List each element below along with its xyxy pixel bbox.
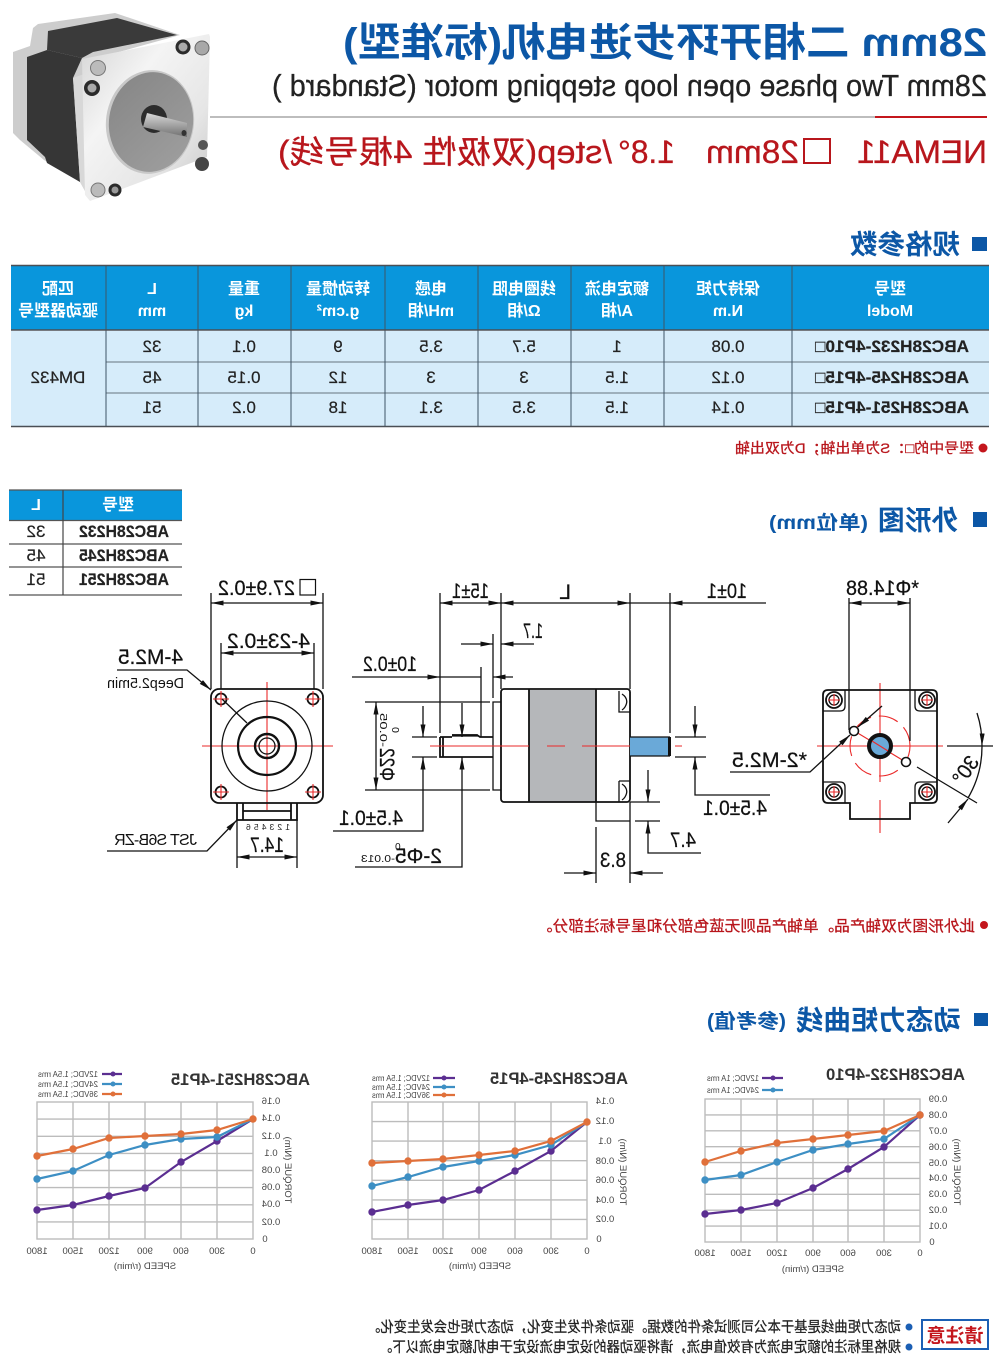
y axis labels: 0.05 bbox=[929, 1158, 947, 1169]
table row 3: ABC28H251-4P15□ bbox=[815, 398, 969, 417]
table row 2: 12 bbox=[329, 368, 347, 387]
drawing: rear view: *Φ14.88 bbox=[846, 577, 919, 600]
x axis labels: 900 bbox=[471, 1246, 487, 1257]
chart: ABC28H251-4P15: ABC28H251-4P15 bbox=[171, 1070, 310, 1089]
table header cells: mm bbox=[138, 303, 166, 320]
x axis labels: 900 bbox=[137, 1246, 153, 1257]
drawing: front view: JST S6B-ZR bbox=[114, 832, 197, 849]
note: outline drawing: 此外形图为双轴产品。单轴产品则无蓝色部分和星号标注部分。 bbox=[537, 918, 975, 935]
legend bbox=[38, 1069, 122, 1099]
y axis labels: 0.12 bbox=[262, 1131, 280, 1142]
chart: ABC28H232-4P10: SPEED (r/min) bbox=[782, 1264, 844, 1275]
legend: 12VDC; 1.5A rms bbox=[38, 1069, 98, 1079]
specification summary line bbox=[278, 134, 987, 170]
chart: ABC28H245-4P15: TORQUE (N/m) bbox=[617, 1139, 628, 1205]
drawing: side view: 4.5±0.1 bbox=[339, 807, 403, 830]
drawing: side view: L bbox=[559, 581, 571, 604]
drawing: front view: 14.7 bbox=[250, 834, 284, 857]
legend bbox=[707, 1073, 783, 1095]
y axis labels bbox=[596, 1096, 614, 1245]
table header cells: 额定电流 bbox=[585, 279, 649, 298]
x axis labels: 1200 bbox=[432, 1246, 454, 1257]
footnote 1: 动态力矩曲线是基于本公司测试条件的数据。驱动条件发生变化，动态力矩也会发生变化。 bbox=[367, 1319, 901, 1336]
small table: length by model: 51 bbox=[27, 570, 45, 589]
legend bbox=[372, 1073, 455, 1100]
x axis labels: 300 bbox=[876, 1248, 892, 1259]
small table: length by model: ABC28H251 bbox=[79, 570, 169, 589]
subtitle: 28mm Two phase open loop stepping motor (Standard ) bbox=[272, 68, 987, 103]
x axis labels: 0 bbox=[917, 1248, 923, 1259]
drawing: side view: Φ22 bbox=[375, 748, 398, 781]
y axis labels: 0 bbox=[929, 1237, 935, 1248]
table header cells: 重量 bbox=[228, 280, 260, 298]
chart: ABC28H251-4P15 bbox=[26, 1069, 310, 1272]
table header cells: A/相 bbox=[601, 302, 633, 320]
drawing: side view: 4.5±0.1 bbox=[703, 797, 767, 820]
table row 2: 3 bbox=[426, 368, 436, 387]
drawing: rear view: *2-M2.5 bbox=[732, 749, 807, 772]
table header cells: 保持力矩 bbox=[696, 280, 760, 298]
table row 3: 3.1 bbox=[419, 398, 443, 417]
small table: length by model: 型号 bbox=[102, 496, 134, 514]
drawing: front view bbox=[107, 577, 333, 868]
y axis labels: 0.16 bbox=[262, 1096, 280, 1107]
legend: 24VDC; 1.5A rms bbox=[372, 1082, 430, 1092]
y axis labels: 0.08 bbox=[929, 1110, 947, 1121]
table row 1: 3.5 bbox=[419, 337, 443, 356]
table row 2: 1.5 bbox=[605, 368, 629, 387]
legend: 24VDC; 1A rms bbox=[707, 1085, 759, 1095]
drawing: side view: -0.013 bbox=[360, 854, 395, 865]
legend: 12VDC; 1.5A rms bbox=[372, 1073, 430, 1083]
y axis labels: 0.14 bbox=[596, 1096, 614, 1107]
table header cells: 转动惯量 bbox=[306, 279, 370, 298]
table row 2: 0.12 bbox=[711, 368, 745, 387]
heading: dynamic torque curves: (参考值) bbox=[707, 1009, 786, 1033]
x axis labels bbox=[26, 1246, 256, 1257]
table row 3: 3.5 bbox=[512, 398, 536, 417]
y axis labels: 0.02 bbox=[262, 1217, 280, 1228]
table row 3: 0.2 bbox=[232, 398, 256, 417]
table header cells: kg bbox=[235, 303, 253, 320]
specification summary line: NEMA11 bbox=[857, 134, 987, 170]
drawing: front view: 27.9±0.2 bbox=[218, 577, 295, 600]
y axis labels: 0.12 bbox=[596, 1116, 614, 1127]
legend: 36VDC; 1.5A rms bbox=[372, 1090, 430, 1100]
legend: 24VDC; 1.5A rms bbox=[38, 1079, 98, 1089]
drawing: side view: 10±1 bbox=[707, 580, 747, 603]
y axis labels: 0.1 bbox=[598, 1136, 612, 1147]
footnote 2: 规格里标注的额定电流为有效值电流，请将驱动器的设定电流设定于电机额定电流以下。 bbox=[379, 1339, 901, 1356]
drawing: side view: 4.7 bbox=[670, 829, 696, 852]
callout: attention label bbox=[922, 1320, 988, 1349]
table row 1: 32 bbox=[143, 337, 161, 356]
x axis labels: 0 bbox=[584, 1246, 590, 1257]
x axis labels: 0 bbox=[250, 1246, 256, 1257]
x axis labels: 300 bbox=[209, 1246, 225, 1257]
table row 3: 1.5 bbox=[605, 398, 629, 417]
y axis labels bbox=[262, 1096, 280, 1245]
table row 2: 0.15 bbox=[227, 368, 261, 387]
table row 3 bbox=[143, 398, 969, 417]
x axis labels: 1500 bbox=[62, 1246, 84, 1257]
heading: outline drawing: 外形图 bbox=[878, 506, 958, 536]
table row 1 bbox=[143, 337, 969, 356]
table header cells: 电感 bbox=[415, 279, 447, 298]
y axis labels: 0 bbox=[596, 1234, 602, 1245]
legend: 36VDC; 1.5A rms bbox=[38, 1089, 98, 1099]
chart: ABC28H251-4P15: TORQUE (N/m) bbox=[282, 1137, 293, 1203]
table row 1: 1 bbox=[612, 337, 622, 356]
x axis labels: 1500 bbox=[730, 1248, 752, 1259]
x axis labels bbox=[361, 1246, 590, 1257]
small table: length by model: ABC28H245 bbox=[79, 546, 169, 565]
table header cells: mH/相 bbox=[408, 302, 454, 320]
table header cells: g.cm² bbox=[317, 303, 359, 320]
y axis labels: 0.02 bbox=[929, 1205, 947, 1216]
small table: length by model: 45 bbox=[27, 546, 45, 565]
table row 2: 45 bbox=[143, 368, 161, 387]
y axis labels: 0.06 bbox=[596, 1175, 614, 1186]
heading: outline drawing bbox=[769, 506, 987, 536]
y axis labels: 0.1 bbox=[264, 1148, 278, 1159]
table: specifications bbox=[11, 266, 989, 426]
specification summary line: 28mm bbox=[706, 134, 799, 170]
y axis labels bbox=[929, 1094, 947, 1248]
heading: outline drawing: (单位mm) bbox=[769, 511, 868, 534]
x axis labels: 1800 bbox=[694, 1248, 716, 1259]
drawing: side view: 1.7 bbox=[523, 620, 543, 643]
chart: ABC28H245-4P15: ABC28H245-4P15 bbox=[490, 1069, 628, 1088]
y axis labels: 0.04 bbox=[596, 1195, 614, 1206]
table row 2: ABC28H245-4P15□ bbox=[815, 368, 969, 387]
photo: stepper motor bbox=[13, 13, 210, 201]
y axis labels: 0.07 bbox=[929, 1126, 947, 1137]
x axis labels bbox=[694, 1248, 923, 1259]
y axis labels: 0.08 bbox=[262, 1165, 280, 1176]
chart: ABC28H232-4P10 bbox=[694, 1065, 965, 1275]
table header cells bbox=[18, 279, 913, 320]
y axis labels: 0.06 bbox=[929, 1142, 947, 1153]
drawing: rear view bbox=[730, 577, 993, 833]
x axis labels: 600 bbox=[173, 1246, 189, 1257]
table row 1: 0.1 bbox=[232, 337, 256, 356]
drawing: front view: Deep2.5min bbox=[107, 675, 184, 692]
table header cells: 匹配 bbox=[42, 281, 74, 298]
table header cells: 线圈电阻 bbox=[492, 279, 556, 298]
table row 1: 9 bbox=[333, 337, 343, 356]
y axis labels: 0.01 bbox=[929, 1221, 947, 1232]
small table: length by model: 32 bbox=[27, 522, 45, 541]
table header cells: Model bbox=[867, 303, 913, 320]
table header cells: Ω/相 bbox=[507, 302, 541, 320]
matching driver cell: DM432 bbox=[31, 368, 85, 387]
x axis labels: 1200 bbox=[766, 1248, 788, 1259]
table header cells: 型号 bbox=[874, 280, 906, 298]
drawing: front view: 4-M2.5 bbox=[118, 646, 183, 669]
table row 3: 18 bbox=[329, 398, 347, 417]
x axis labels: 300 bbox=[543, 1246, 559, 1257]
table header cells: L bbox=[147, 281, 157, 298]
x axis labels: 1800 bbox=[26, 1246, 48, 1257]
small table: length by model: L bbox=[31, 497, 41, 514]
x axis labels: 600 bbox=[840, 1248, 856, 1259]
table row 1: 5.7 bbox=[512, 337, 536, 356]
drawing: side view: 2-Φ5 bbox=[395, 845, 442, 868]
drawing: side view: 0 bbox=[389, 727, 401, 733]
heading: specifications: 规格参数 bbox=[850, 230, 960, 260]
drawing: side view: 15±1 bbox=[452, 580, 489, 603]
small table: length by model bbox=[9, 490, 182, 595]
x axis labels: 1800 bbox=[361, 1246, 383, 1257]
drawing: side view: 10±0.2 bbox=[363, 653, 417, 676]
y axis labels: 0.09 bbox=[929, 1094, 947, 1105]
table row 1: ABC28H232-4P10□ bbox=[815, 337, 969, 356]
drawing: side view: 0 bbox=[395, 842, 401, 853]
chart: ABC28H251-4P15: SPEED (r/min) bbox=[114, 1261, 176, 1272]
drawing: side view bbox=[333, 580, 770, 883]
y axis labels: 0.06 bbox=[262, 1182, 280, 1193]
table header cells: N.m bbox=[713, 303, 743, 320]
x axis labels: 1500 bbox=[397, 1246, 419, 1257]
y axis labels: 0.14 bbox=[262, 1113, 280, 1124]
x axis labels: 1200 bbox=[98, 1246, 120, 1257]
table row 3: 0.14 bbox=[711, 398, 745, 417]
table row 2: 3 bbox=[519, 368, 529, 387]
y axis labels: 0 bbox=[262, 1234, 268, 1245]
callout: attention label: 请注意 bbox=[926, 1324, 984, 1347]
x axis labels: 900 bbox=[805, 1248, 821, 1259]
drawing: side view: -0.05 bbox=[377, 713, 389, 747]
header rule bbox=[210, 116, 987, 118]
specification summary line: /step(双极性 4根号线) bbox=[278, 134, 612, 170]
chart: ABC28H245-4P15 bbox=[361, 1069, 628, 1272]
heading: dynamic torque curves bbox=[707, 1006, 988, 1036]
chart: ABC28H232-4P10: TORQUE (N/m) bbox=[951, 1139, 962, 1205]
small table: length by model: ABC28H232 bbox=[79, 522, 169, 541]
x axis labels: 600 bbox=[507, 1246, 523, 1257]
table row 3: 51 bbox=[143, 398, 161, 417]
drawing: rear view: 30° bbox=[948, 752, 984, 789]
y axis labels: 0.04 bbox=[929, 1173, 947, 1184]
legend: 12VDC; 1A rms bbox=[707, 1073, 759, 1083]
table row 1: 0.08 bbox=[711, 337, 745, 356]
note: model suffix: 型号中的□：S为单出轴；D为双出轴 bbox=[735, 440, 974, 457]
heading: dynamic torque curves: 动态力矩曲线 bbox=[796, 1006, 961, 1036]
chart: ABC28H245-4P15: SPEED (r/min) bbox=[449, 1261, 511, 1272]
chart: ABC28H232-4P10: ABC28H232-4P10 bbox=[826, 1065, 965, 1084]
drawing: side view: 8.3 bbox=[600, 849, 626, 872]
y axis labels: 0.02 bbox=[596, 1214, 614, 1225]
drawing: front view: 123456 bbox=[246, 822, 290, 832]
y axis labels: 0.03 bbox=[929, 1189, 947, 1200]
drawing: front view: 4-23±0.2 bbox=[227, 630, 310, 653]
table header cells: 驱动器型号 bbox=[18, 302, 98, 320]
specification summary line: 1.8° bbox=[618, 134, 675, 170]
y axis labels: 0.08 bbox=[596, 1156, 614, 1167]
y axis labels: 0.04 bbox=[262, 1199, 280, 1210]
title: 28mm 二相开环步进电机(标准型) bbox=[343, 21, 987, 65]
table row 2 bbox=[143, 368, 969, 387]
